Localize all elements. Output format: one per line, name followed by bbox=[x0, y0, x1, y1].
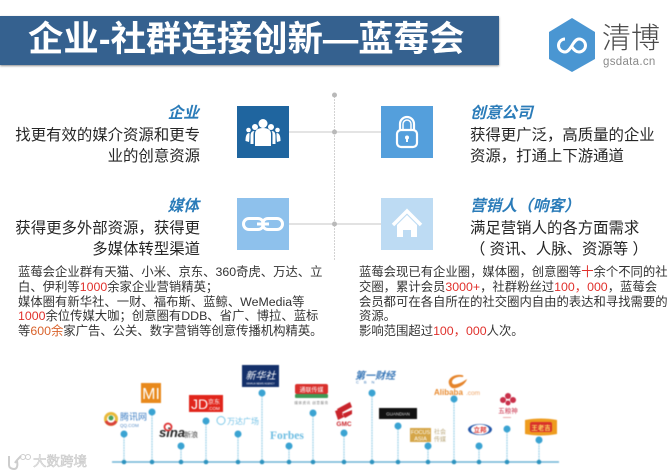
logo: sina 新浪 bbox=[159, 424, 198, 440]
heading: 创意公司: 创意公司 bbox=[470, 105, 533, 122]
logo: 腾讯网: 腾讯网 bbox=[120, 411, 147, 422]
logo: black banner: GUANDIAN bbox=[386, 412, 410, 416]
logo: 社会传媒 tan: ASIA bbox=[414, 436, 427, 442]
icon: house bbox=[381, 198, 433, 250]
logo: 京东 JD: .COM bbox=[208, 406, 220, 411]
logo: red and green banner bbox=[294, 384, 329, 405]
logo: 社会传媒 tan bbox=[410, 428, 446, 444]
logo: blue and red oval bbox=[468, 424, 492, 435]
panel: 创意公司 bbox=[470, 104, 655, 164]
text block: right paragraph bbox=[359, 265, 668, 338]
text: 创意公司 description: 资源，打通上下游通道 bbox=[470, 148, 624, 164]
logo wordmark: 清博 bbox=[602, 23, 660, 55]
logo: 第一财经: 第一财经 bbox=[355, 370, 397, 382]
logo: 小米 mi: MI bbox=[142, 386, 160, 403]
logo: gold banner: 王老吉 bbox=[531, 423, 551, 432]
logo: gold banner bbox=[525, 418, 557, 436]
logo: red flower bbox=[498, 393, 518, 418]
watermark text: 大数跨境 bbox=[33, 454, 87, 469]
watermark icon bbox=[8, 454, 31, 470]
logo: red flower: 五粮神 bbox=[498, 406, 518, 415]
text block: right paragraph: 会员都可在各自所在的社交圈内自由的表达和寻找需要的 bbox=[359, 295, 668, 309]
text: 媒体 description: 多媒体转型渠道 bbox=[92, 240, 200, 258]
text: 企业 description: 业的创意资源 bbox=[108, 148, 200, 164]
timeline axis and stems bbox=[112, 390, 559, 464]
text: 创意公司 description bbox=[470, 126, 655, 164]
chart: brand logo timeline bbox=[103, 364, 560, 465]
logo: 社会传媒 tan: 传媒 bbox=[434, 436, 446, 444]
text block: right paragraph: 资源。 bbox=[359, 309, 396, 323]
logo: 新华社: XINHUA NEWS AGENCY bbox=[246, 382, 275, 386]
text block: left paragraph: 媒体圈有新华社、一财、福布斯、蓝鲸、WeMedia等 bbox=[18, 295, 304, 309]
logo: 社会传媒 tan: 社会 bbox=[434, 428, 446, 436]
heading: 营销人（响客）: 营销人（响客） bbox=[470, 198, 580, 215]
icon: people bbox=[237, 106, 289, 158]
text block: right paragraph: 蓝莓会现已有企业圈，媒体圈，创意圈等十余个不同的社 bbox=[359, 265, 668, 279]
text block: left paragraph: 白、伊利等1000余家企业营销精英； bbox=[18, 280, 218, 294]
center connector with branches bbox=[289, 92, 381, 260]
heading: 媒体: 媒体 bbox=[168, 198, 199, 215]
logo: sina 新浪: 新浪 bbox=[184, 430, 198, 439]
panel: 企业 bbox=[15, 104, 200, 164]
icon: padlock bbox=[381, 106, 433, 158]
logo: GMC: GMC bbox=[336, 421, 352, 428]
text: 营销人 description: 满足营销人的各方面需求 bbox=[470, 220, 639, 237]
logo: 新华社 bbox=[242, 365, 279, 387]
logo: 万达广场: 万达广场 bbox=[227, 416, 259, 426]
icon: chain link bbox=[237, 198, 289, 250]
logo: Alibaba.com bbox=[434, 375, 480, 397]
heading: 企业: 企业 bbox=[168, 105, 199, 122]
panel: 媒体 bbox=[15, 198, 201, 258]
text block: left paragraph: 蓝莓会企业群有天猫、小米、京东、360奇虎、万达、立 bbox=[18, 265, 322, 279]
text: 创意公司 description: 获得更广泛，高质量的企业 bbox=[470, 127, 655, 144]
panel: 营销人（响客） bbox=[470, 198, 648, 258]
title banner bbox=[0, 16, 499, 65]
text block: left paragraph bbox=[18, 265, 323, 338]
logo: 京东 JD: 京东 bbox=[208, 398, 220, 406]
logo: GMC bbox=[335, 402, 352, 428]
logo: red and green banner: 媒体资讯 创意服务 bbox=[294, 400, 329, 405]
logo: black banner bbox=[379, 408, 417, 419]
logo: 社会传媒 tan: FOCUS bbox=[411, 430, 430, 436]
text: 企业 description: 找更有效的媒介资源和更专 bbox=[15, 127, 200, 144]
title text: 企业-社群连接创新—蓝莓会 bbox=[28, 19, 464, 59]
logo: blue and red oval: 立邦 bbox=[474, 425, 487, 434]
logo: sina 新浪: sina bbox=[159, 425, 185, 440]
logo: Alibaba.com: Alibaba bbox=[434, 388, 463, 397]
text block: left paragraph: 等600余家广告、公关、数字营销等创意传播机构精英。 bbox=[18, 324, 323, 338]
logo: Forbes: Forbes bbox=[270, 430, 304, 442]
logo: 腾讯网: QQ.COM bbox=[120, 423, 139, 428]
watermark: 大数跨境 bbox=[8, 454, 87, 470]
logo domain: gsdata.cn bbox=[603, 56, 656, 68]
text block: right paragraph: 影响范围超过100，000人次。 bbox=[359, 324, 524, 338]
text: 媒体 description: 获得更多外部资源，获得更 bbox=[15, 220, 200, 237]
text: 营销人 description: （ 资讯、人脉、资源等 ） bbox=[470, 240, 648, 258]
text block: right paragraph: 交圈，累计会员3000+，社群粉丝过100，000，蓝莓会 bbox=[359, 280, 657, 294]
logo: 京东 JD bbox=[189, 395, 223, 412]
logo: Alibaba.com: .com bbox=[466, 390, 480, 397]
text: 营销人 description bbox=[470, 220, 648, 258]
logo: 万达广场 bbox=[217, 416, 259, 426]
logo: 清博 gsdata.cn bbox=[549, 18, 660, 72]
text: 媒体 description bbox=[15, 220, 200, 258]
logo: 腾讯网 bbox=[106, 411, 147, 428]
logo: 京东 JD: JD bbox=[191, 396, 208, 412]
text: 企业 description bbox=[15, 126, 200, 164]
logo: red and green banner: 通联传媒 bbox=[299, 386, 324, 394]
icon: blue hexagon infinity bbox=[549, 18, 595, 72]
logo: 第一财经: CBN bbox=[356, 380, 379, 384]
logo: 新华社: 新华社 bbox=[246, 370, 276, 382]
text block: left paragraph: 1000余位传媒大咖；创意圈有DDB、省广、博拉、蓝标 bbox=[18, 309, 318, 323]
